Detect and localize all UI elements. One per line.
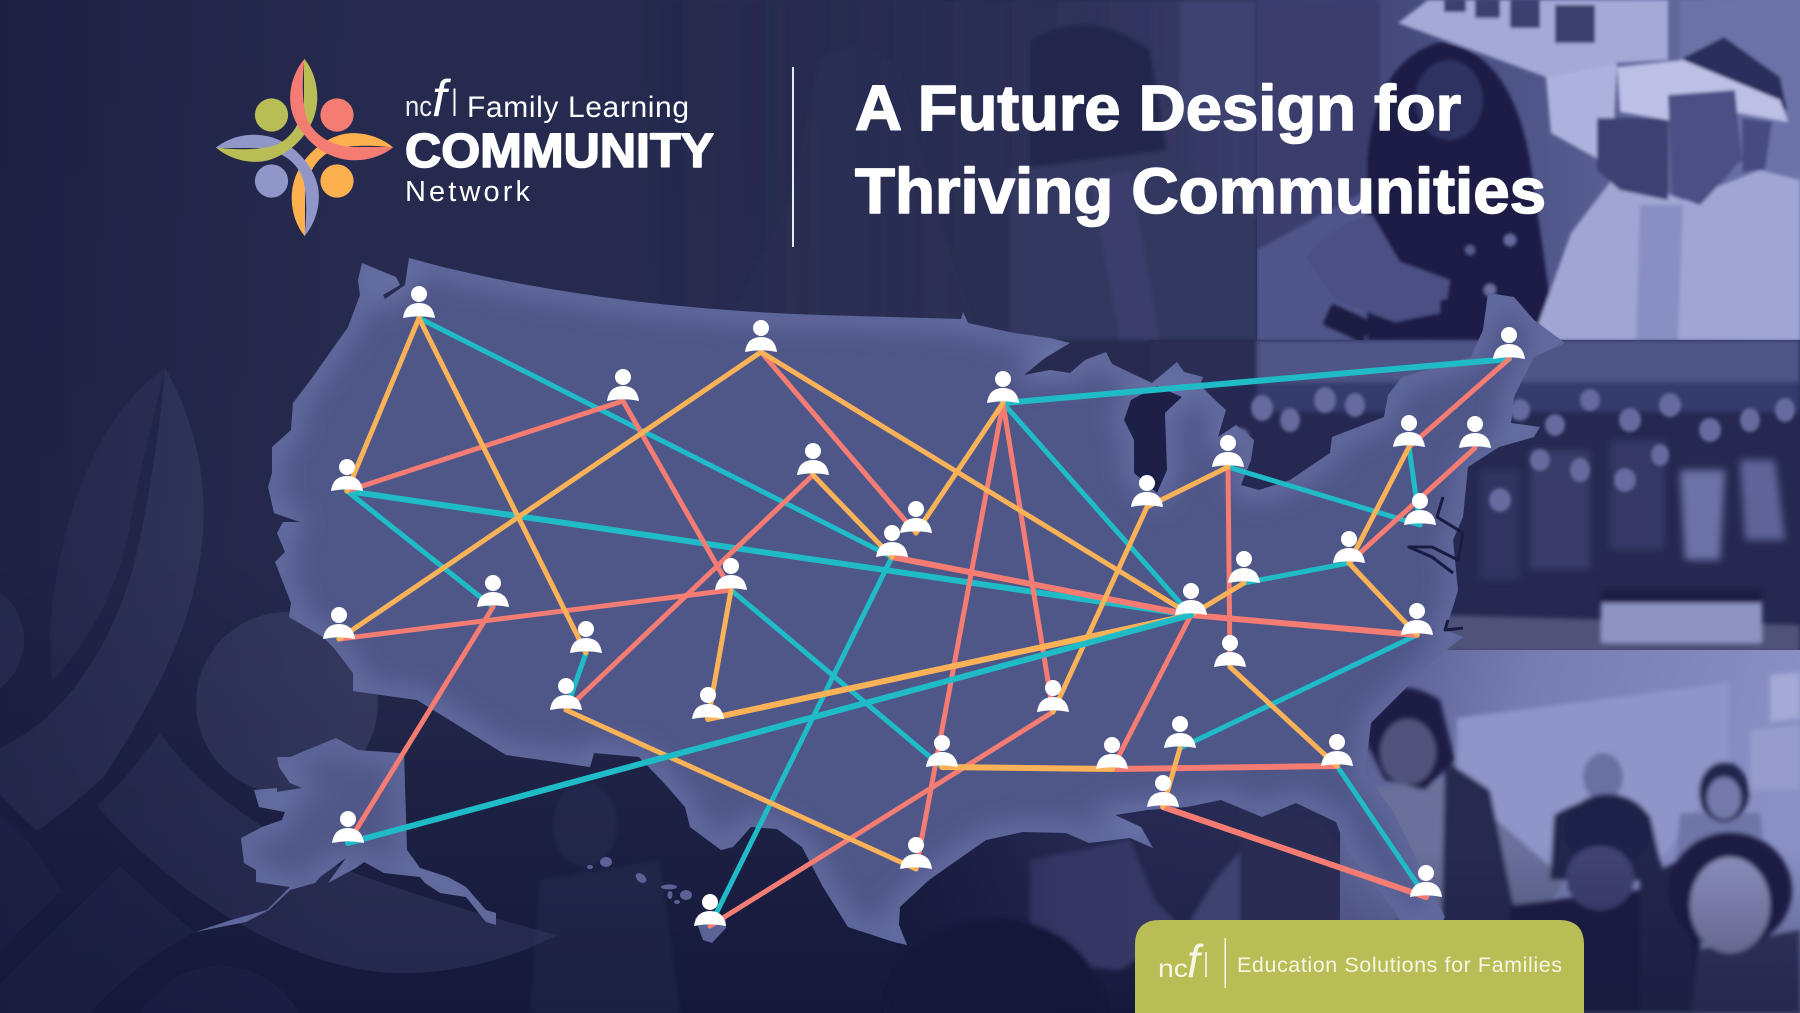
photo: bottom right, smiling educators bbox=[1340, 650, 1800, 1013]
network line: Alaska teal link above yellow bbox=[348, 615, 1191, 843]
network lines: yellow connections bbox=[339, 318, 1417, 869]
logo wordmark bbox=[405, 70, 714, 208]
logo wordmark: Family Learning bbox=[467, 91, 689, 124]
title: A Future Design for bbox=[855, 72, 1461, 144]
title: Thriving Communities bbox=[855, 155, 1546, 227]
photo: middle right, group by garden bed bbox=[1150, 340, 1800, 652]
photo: top middle group bbox=[640, 0, 1257, 340]
title bbox=[855, 72, 1546, 227]
map: Alaska bbox=[195, 738, 496, 932]
badge ncfl logo: f bbox=[1187, 935, 1204, 987]
person markers on the map bbox=[323, 286, 1525, 926]
logo wordmark: f bbox=[432, 70, 451, 128]
network lines: coral connections bbox=[339, 352, 1509, 926]
Lake Michigan shadow bbox=[1124, 386, 1182, 493]
badge ncfl logo: l bbox=[1204, 947, 1208, 985]
background: faint logo watermark bbox=[0, 368, 557, 1013]
badge ncfl logo: nc bbox=[1158, 955, 1188, 983]
logo wordmark: nc bbox=[405, 91, 432, 123]
badge text: Education Solutions for Families bbox=[1237, 953, 1562, 977]
badge ncfl logo bbox=[1158, 935, 1208, 987]
network lines: teal connections bbox=[347, 318, 1509, 926]
logo wordmark: Network bbox=[405, 176, 530, 208]
divider between logo and title bbox=[792, 67, 794, 247]
photo: bottom centre, dark workshop bbox=[885, 800, 1440, 1013]
icon: Family Learning Community logo mark bbox=[216, 58, 394, 236]
logo wordmark: l bbox=[452, 83, 457, 125]
map: contiguous United States bbox=[268, 258, 1565, 945]
map: Hawaii bbox=[587, 857, 726, 943]
tagline badge bbox=[1135, 920, 1584, 1013]
logo wordmark: COMMUNITY bbox=[405, 125, 714, 178]
photo: left bottom, faint person bbox=[530, 783, 680, 1013]
photo: top right, VR session bbox=[1257, 0, 1800, 343]
